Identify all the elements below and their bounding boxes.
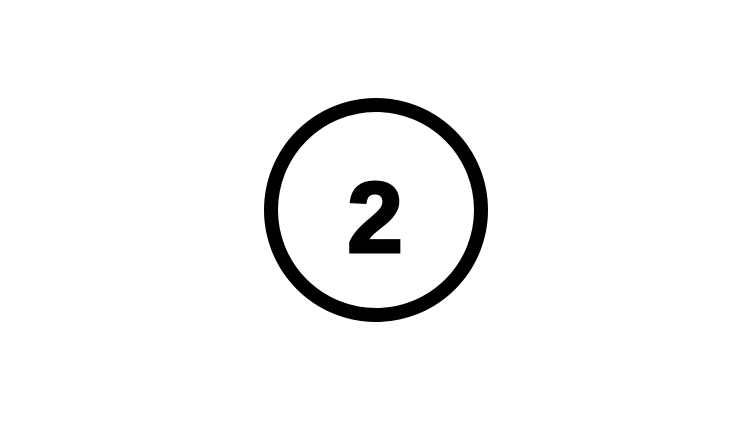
circle outline (271, 105, 481, 315)
number 2: 2 (347, 162, 403, 274)
